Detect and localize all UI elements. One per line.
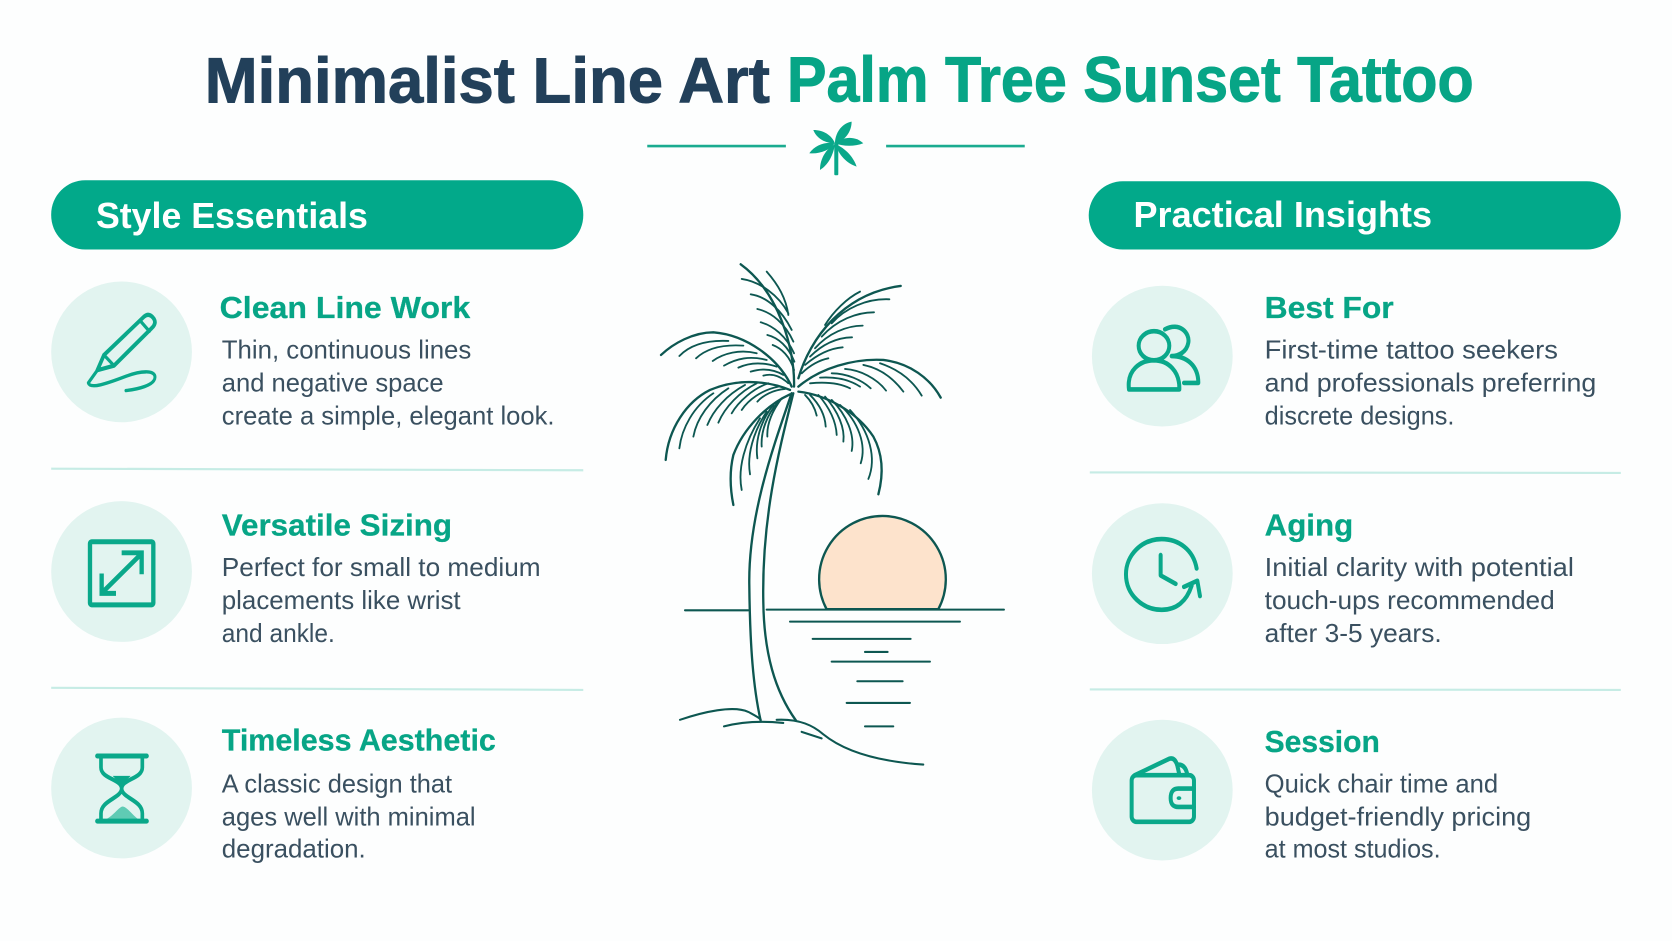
body: clean line work: Thin, continuous lines (222, 334, 471, 364)
icon: resize arrows (51, 501, 192, 642)
body: best for (1265, 334, 1596, 430)
icon: pencil (51, 282, 192, 422)
body: session: budget-friendly pricing (1265, 801, 1531, 831)
body: versatile sizing: placements like wrist (222, 585, 461, 615)
item: aging (1092, 503, 1574, 648)
heading: versatile sizing: Versatile Sizing (222, 507, 452, 542)
heading: timeless aesthetic: Timeless Aesthetic (222, 723, 496, 758)
item: clean line work (51, 282, 554, 430)
ground (680, 709, 923, 765)
heading: session: Session (1265, 724, 1380, 759)
illustration: palm tree at sunset (661, 264, 1004, 765)
icon: wallet (1092, 720, 1233, 861)
item: best for (1092, 286, 1596, 430)
title: Palm Tree Sunset Tattoo (787, 43, 1474, 115)
body: best for: First-time tattoo seekers (1265, 334, 1558, 364)
icon: clock with arrow (1092, 503, 1233, 644)
sun (819, 516, 946, 609)
body: session: at most studios. (1265, 833, 1441, 863)
body: clean line work: and negative space (222, 367, 444, 397)
icon: two people (1092, 286, 1233, 427)
body: timeless aesthetic: ages well with minimal (222, 801, 476, 831)
body: aging: Initial clarity with potential (1265, 552, 1574, 582)
body: aging (1265, 552, 1574, 648)
body: timeless aesthetic (222, 768, 476, 863)
header pill: style essentials: Style Essentials (96, 195, 368, 236)
item: timeless aesthetic (51, 718, 496, 863)
body: aging: touch-ups recommended (1265, 585, 1555, 615)
horizon and water reflections (685, 610, 1004, 726)
title: Minimalist Line Art (205, 44, 770, 116)
panel: practical insights (1089, 181, 1621, 863)
heading: best for: Best For (1265, 290, 1394, 325)
header pill: practical insights: Practical Insights (1134, 194, 1432, 235)
item: session (1092, 720, 1531, 863)
body: timeless aesthetic: degradation. (222, 833, 366, 863)
title (205, 43, 1474, 116)
palm trunk (749, 393, 796, 720)
heading: clean line work: Clean Line Work (220, 290, 471, 325)
palm fronds (661, 264, 941, 505)
panel: style essentials (51, 180, 583, 863)
body: versatile sizing: and ankle. (222, 618, 335, 648)
icon: hourglass (51, 718, 192, 858)
body: versatile sizing: Perfect for small to medium (222, 552, 541, 582)
title divider with palm icon (647, 122, 1025, 175)
item: versatile sizing (51, 501, 541, 648)
header pill: style essentials (51, 180, 583, 250)
body: best for: and professionals preferring (1265, 367, 1596, 397)
body: timeless aesthetic: A classic design that (222, 768, 453, 798)
body: session (1265, 768, 1531, 863)
body: clean line work: create a simple, elegant look. (222, 400, 554, 430)
body: best for: discrete designs. (1265, 400, 1454, 430)
body: clean line work (222, 334, 554, 430)
header pill: practical insights (1089, 181, 1621, 250)
body: versatile sizing (222, 552, 541, 648)
body: session: Quick chair time and (1265, 768, 1498, 798)
heading: aging: Aging (1265, 507, 1353, 542)
body: aging: after 3-5 years. (1265, 618, 1442, 648)
